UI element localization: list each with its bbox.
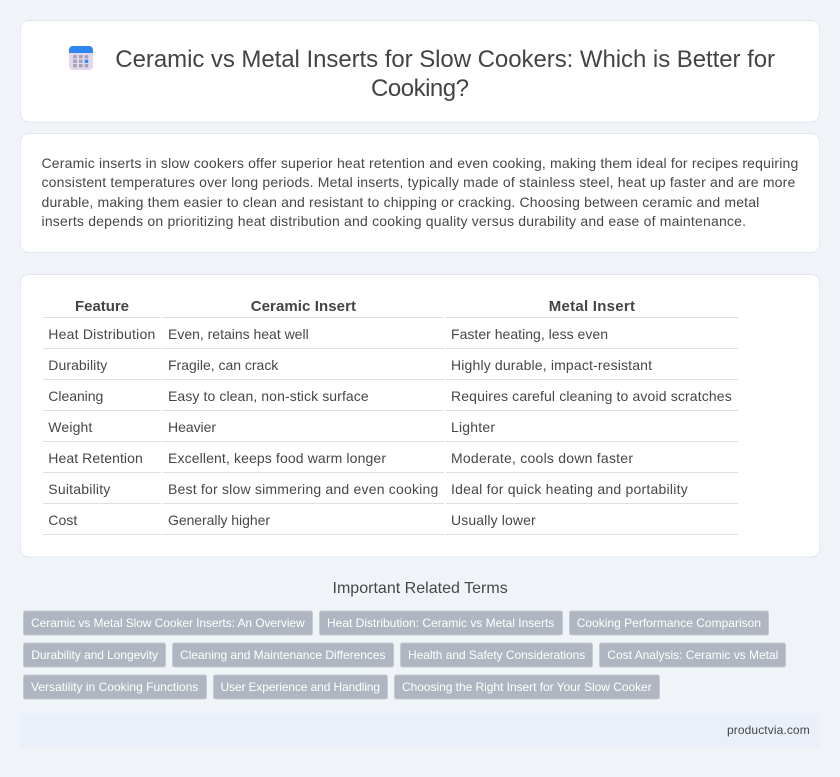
table row: suitability: Best for slow simmering and even cooking [168,481,438,497]
tag: overview [24,611,312,635]
table row: weight: Heavier [168,419,216,435]
table row: suitability: Suitability [48,481,110,497]
heading: important related terms: Important Related Terms [332,580,508,597]
tag: versatility [24,675,206,699]
icon: calendar [69,46,93,70]
table header row: Feature [75,298,129,315]
summary text block: inserts depends on prioritizing heat distribution and cooking quality versus durability and ease of maintenance. [42,213,746,229]
summary text block: durable, making them easier to clean and resistant to chipping or cracking. Choosing between ceramic and metal [42,194,759,210]
table row: cleaning [43,388,738,411]
panel: comparison table [20,274,820,557]
table row: heat distribution: Faster heating, less even [451,326,608,342]
table row: cost: Generally higher [168,512,270,528]
table row: durability [43,357,738,380]
table row: heat retention: Excellent, keeps food warm longer [168,450,386,466]
table row: heat distribution: Heat Distribution [48,326,155,342]
related term tags [24,611,786,699]
tag: health and safety [400,643,592,667]
tag: cleaning [172,643,394,667]
tag: versatility: Versatility in Cooking Functions [31,680,198,694]
footer bar: productvia.com [727,723,810,737]
table row: cost: Cost [48,512,77,528]
table row: cost: Usually lower [451,512,536,528]
tag: heat distribution [320,611,562,635]
tag: choosing insert [394,675,660,699]
table row: durability: Fragile, can crack [168,357,279,373]
table row: cleaning: Cleaning [48,388,103,404]
tag: durability [24,643,166,667]
table row: heat distribution [43,326,738,349]
tag: user experience [214,675,388,699]
tag: cooking performance [570,611,768,635]
tag: user experience: User Experience and Handling [220,680,380,694]
title: Cooking? [371,75,469,102]
tag: durability: Durability and Longevity [31,648,158,662]
tag: heat distribution: Heat Distribution: Ceramic vs Metal Inserts [327,616,554,630]
table row: suitability: Ideal for quick heating and portability [451,481,688,497]
table row: weight: Lighter [451,419,495,435]
tag: choosing insert: Choosing the Right Insert for Your Slow Cooker [402,680,652,694]
summary text block: Ceramic inserts in slow cookers offer superior heat retention and even cooking, making them ideal for recipes requiring [42,155,798,171]
tag: cleaning: Cleaning and Maintenance Differences [180,648,386,662]
tag: cost analysis: Cost Analysis: Ceramic vs Metal [607,648,778,662]
tag: cooking performance: Cooking Performance Comparison [577,616,761,630]
table row: suitability [43,481,738,504]
table header row: Ceramic Insert [251,298,356,315]
table row: durability: Highly durable, impact-resistant [451,357,652,373]
table row: heat retention: Moderate, cools down faster [451,450,633,466]
summary text block: consistent temperatures over long periods. Metal inserts, typically made of stainless steel, heat up faster and are more [42,174,796,190]
table row: cleaning: Easy to clean, non-stick surface [168,388,369,404]
title: Ceramic vs Metal Inserts for Slow Cookers: Which is Better for [115,46,775,73]
tag: health and safety: Health and Safety Considerations [408,648,585,662]
table row: cleaning: Requires careful cleaning to avoid scratches [451,388,732,404]
table header row: Metal Insert [549,298,635,315]
table row: heat distribution: Even, retains heat well [168,326,309,342]
panel: header [20,20,820,122]
panel: summary [20,134,820,252]
table row: heat retention: Heat Retention [48,450,143,466]
table row: cost [43,512,738,535]
table header row [43,298,738,318]
title [115,46,775,102]
table row: weight [43,419,738,442]
tag: cost analysis [600,643,786,667]
table row: durability: Durability [48,357,107,373]
summary text block [42,155,798,229]
tag: overview: Ceramic vs Metal Slow Cooker Inserts: An Overview [31,616,305,630]
table row: heat retention [43,450,738,473]
table row: weight: Weight [48,419,92,435]
footer bar [20,713,820,747]
